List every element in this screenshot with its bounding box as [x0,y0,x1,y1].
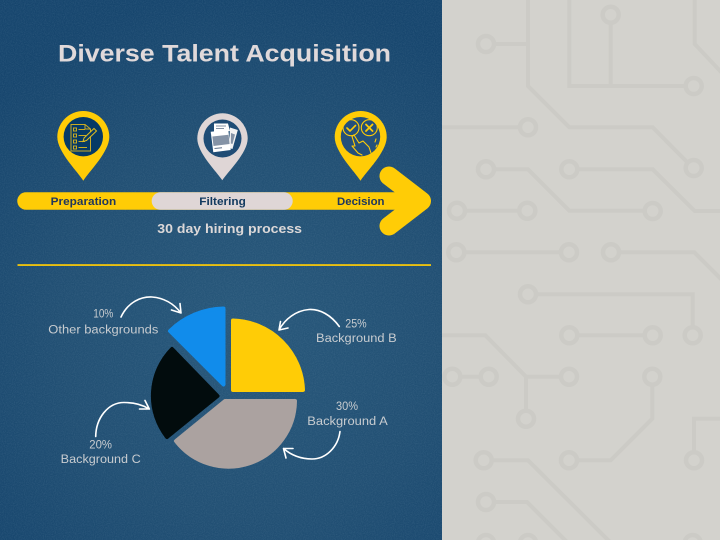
pie label: Background B: Background B [316,333,397,345]
pie label: other backgrounds: Other backgrounds [48,324,159,336]
caption: 30 day hiring process: 30 day hiring process [157,221,302,236]
slice: Background B 25% [233,320,303,390]
timeline arrow [26,176,422,226]
icon: check, cross and hand [343,120,377,155]
slice: Background C 20% [153,349,218,437]
arrow: to Background A slice [284,432,340,459]
panel: circuit pattern [442,0,720,540]
divider line [18,264,431,266]
pie label: Background B [316,318,397,345]
icon: checklist and pencil [71,124,96,151]
arrow: to Background C slice [96,400,149,436]
pin: filtering documents [197,113,248,180]
arrow: to Background B slice [279,309,339,330]
pie label: Background A [307,401,388,428]
pie label: Background C [61,439,141,466]
pin: preparation checklist [57,111,109,181]
pie label: Background A: Background A [307,416,388,428]
pie label: other backgrounds: 10% [93,308,113,320]
arrow: to other backgrounds slice [121,297,181,317]
pie label: Background A: 30% [336,401,358,413]
pie label: Background B: 25% [345,318,367,330]
slice: Background A 30% [176,401,295,467]
pie chart [153,308,303,467]
label: Decision: Decision [337,196,385,208]
panel: blue background [0,0,442,540]
label: Filtering: Filtering [199,196,246,208]
filtering segment [152,192,293,210]
pin: decision [335,111,387,181]
icon: stacked papers [211,124,238,152]
label: Preparation: Preparation [51,196,116,208]
pie label: Background C: Background C [61,454,141,466]
title: Diverse Talent Acquisition [58,40,391,68]
pie label: other backgrounds [48,308,159,336]
slice: other backgrounds 10% [170,308,224,384]
pie label: Background C: 20% [89,439,112,451]
